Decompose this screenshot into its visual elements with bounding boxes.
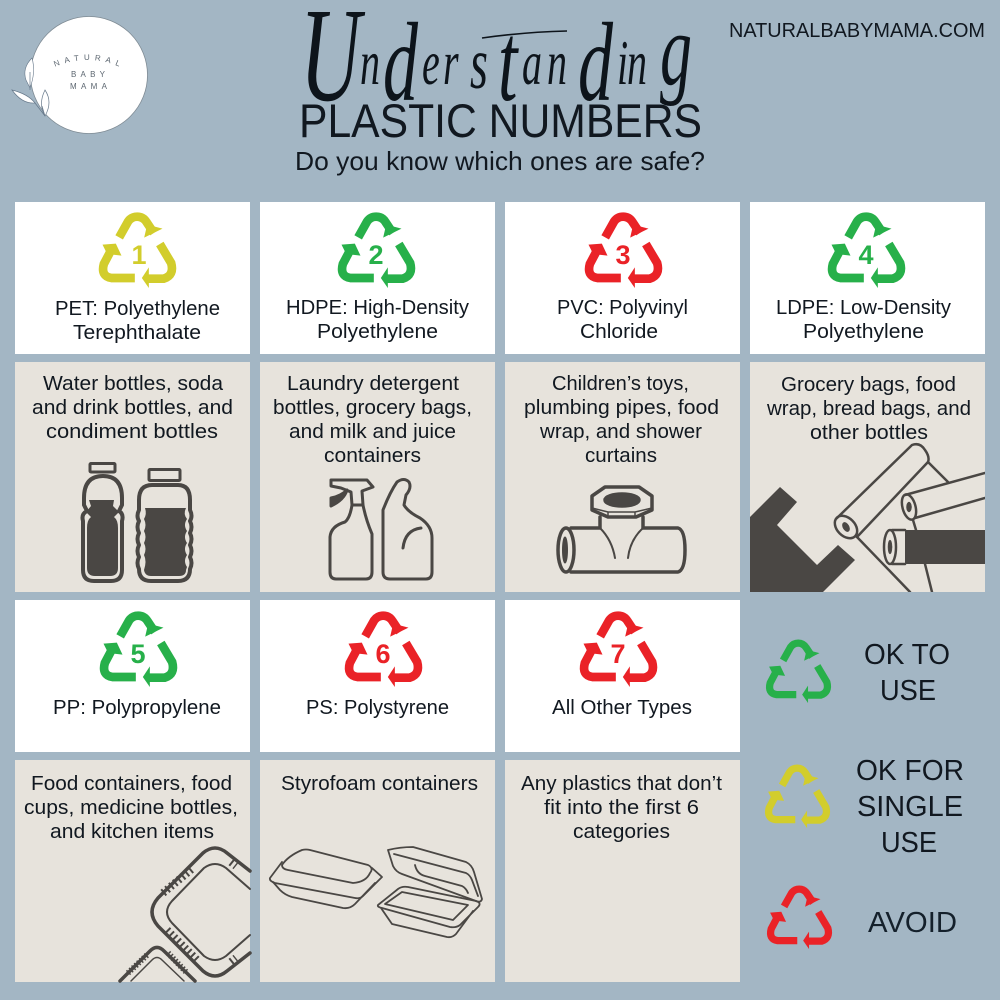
panel: PVC uses	[505, 362, 740, 592]
icon: recycling 5: 5	[130, 639, 146, 669]
title: script heading	[300, 0, 692, 130]
label: PVC: PVC: Polyvinyl	[557, 296, 688, 319]
icon: recycling 1: 1	[131, 240, 147, 270]
icon: recycling 6	[348, 616, 418, 687]
label: avoid: AVOID	[868, 907, 957, 939]
text: other uses: Any plastics that don’t	[521, 772, 722, 795]
panel: 1 PET	[15, 202, 250, 354]
panel: 7 Other	[505, 600, 740, 752]
icon: recycling 3	[588, 217, 658, 288]
logo: Natural Baby Mama: BABY	[71, 70, 106, 79]
panel: 5 PP	[15, 600, 250, 752]
text: other uses	[521, 772, 722, 843]
label: PVC	[557, 296, 688, 343]
icon: recycling 3: 3	[615, 240, 631, 270]
text: HDPE uses: Laundry detergent	[287, 372, 459, 395]
panel: 2 HDPE	[260, 202, 495, 354]
label: PET: Terephthalate	[73, 321, 201, 344]
label: LDPE	[776, 296, 952, 343]
legend: avoid	[770, 889, 957, 949]
text: LDPE uses	[766, 373, 971, 444]
panel: 4 LDPE	[750, 202, 985, 354]
label: HDPE: HDPE: High-Density	[286, 296, 470, 319]
label: ok to use	[864, 639, 950, 707]
icon: recycling 1	[102, 217, 172, 288]
panel: HDPE uses	[260, 362, 495, 592]
label: LDPE: LDPE: Low-Density	[776, 296, 952, 319]
icon: recycling 2	[342, 217, 411, 288]
icon: plastic bag and rolls	[750, 444, 985, 592]
icon: recycling 6: 6	[375, 639, 391, 669]
icon: pipe	[558, 487, 685, 572]
text: PVC uses: curtains	[585, 444, 657, 467]
panel: PET uses	[15, 362, 250, 592]
label: other: All Other Types	[552, 696, 692, 719]
label: ok to use: OK TO	[864, 639, 950, 671]
text: other uses: categories	[573, 820, 670, 843]
text: PP uses: Food containers, food	[31, 772, 232, 795]
text: PET uses: Water bottles, soda	[43, 372, 224, 395]
text: LDPE uses: wrap, bread bags, and	[766, 397, 971, 420]
title: script heading: n	[547, 26, 567, 98]
title: script heading: t	[498, 2, 519, 125]
text: HDPE uses: bottles, grocery bags,	[273, 396, 472, 419]
text: other uses: fit into the first 6	[544, 796, 699, 819]
panel: PP uses	[15, 760, 250, 982]
label: ok to use: USE	[880, 675, 936, 707]
icon: recycling 4	[832, 217, 901, 288]
text: PVC uses	[524, 372, 719, 467]
text: PP uses: cups, medicine bottles,	[24, 796, 238, 819]
label: ok for single use: USE	[881, 827, 937, 859]
text: PET uses: and drink bottles, and	[32, 396, 233, 419]
title: script heading: n	[627, 26, 647, 98]
text: PVC uses: plumbing pipes, food	[524, 396, 719, 419]
text: PP uses	[24, 772, 238, 843]
text: PVC uses: Children’s toys,	[552, 372, 689, 395]
title: script heading: s	[470, 23, 488, 105]
title: script heading: n	[360, 26, 380, 98]
icon: recycling 7: 7	[610, 639, 626, 669]
panel: 3 PVC	[505, 202, 740, 354]
icon: yellow recycling	[768, 768, 826, 828]
icon: recycling 5	[104, 616, 173, 687]
title: script heading: i	[617, 26, 628, 98]
panel: other uses	[505, 760, 740, 982]
text: PET uses	[32, 372, 233, 443]
label: PVC: Chloride	[580, 320, 658, 343]
text: PS uses: Styrofoam containers	[281, 772, 478, 795]
label: ok for single use	[856, 755, 964, 859]
label: PP: PP: Polypropylene	[53, 696, 221, 719]
logo: Natural Baby Mama: NATURAL	[54, 54, 119, 66]
icon: foam boxes	[270, 847, 482, 937]
icon: red recycling	[770, 889, 828, 949]
panel: 6 PS	[260, 600, 495, 752]
icon: food containers	[120, 848, 250, 981]
text: LDPE uses: other bottles	[810, 421, 928, 444]
icon: recycling 4: 4	[858, 240, 874, 270]
label: ok for single use: OK FOR	[856, 755, 964, 787]
title: script heading: r	[443, 26, 459, 98]
heading: plastic numbers: PLASTIC NUMBERS	[299, 94, 702, 147]
label: HDPE	[286, 296, 470, 343]
text: HDPE uses	[273, 372, 472, 467]
logo: Natural Baby Mama	[11, 16, 148, 134]
label: PS: PS: Polystyrene	[306, 696, 449, 719]
label: HDPE: Polyethylene	[317, 320, 438, 343]
title: script heading: e	[422, 26, 440, 98]
icon: green recycling	[769, 643, 827, 703]
subtitle: Do you know which ones are safe?	[295, 146, 705, 176]
title: script heading: d	[578, 2, 613, 125]
text: PVC uses: wrap, and shower	[539, 420, 702, 443]
label: LDPE: Polyethylene	[803, 320, 924, 343]
text: PET uses: condiment bottles	[46, 420, 218, 443]
text: LDPE uses: Grocery bags, food	[781, 373, 956, 396]
legend: ok to use	[769, 639, 950, 707]
title: script heading: d	[383, 2, 418, 125]
icon: recycling 7	[584, 616, 653, 687]
icon: recycling 2: 2	[368, 240, 384, 270]
label: PET: PET: Polyethylene	[55, 297, 220, 320]
panel: PS uses	[260, 760, 495, 982]
icon: bottles	[82, 464, 192, 581]
text: HDPE uses: and milk and juice	[289, 420, 456, 443]
icon: spray bottles	[330, 480, 432, 579]
title: script heading: a	[522, 26, 542, 98]
label: PET	[55, 297, 220, 344]
website: NATURALBABYMAMA.COM	[729, 20, 985, 42]
label: ok for single use: SINGLE	[857, 791, 963, 823]
text: HDPE uses: containers	[324, 444, 421, 467]
text: PP uses: and kitchen items	[50, 820, 214, 843]
logo: Natural Baby Mama: MAMA	[70, 82, 108, 91]
legend: ok for single use	[768, 755, 964, 859]
panel: LDPE uses	[750, 362, 985, 592]
